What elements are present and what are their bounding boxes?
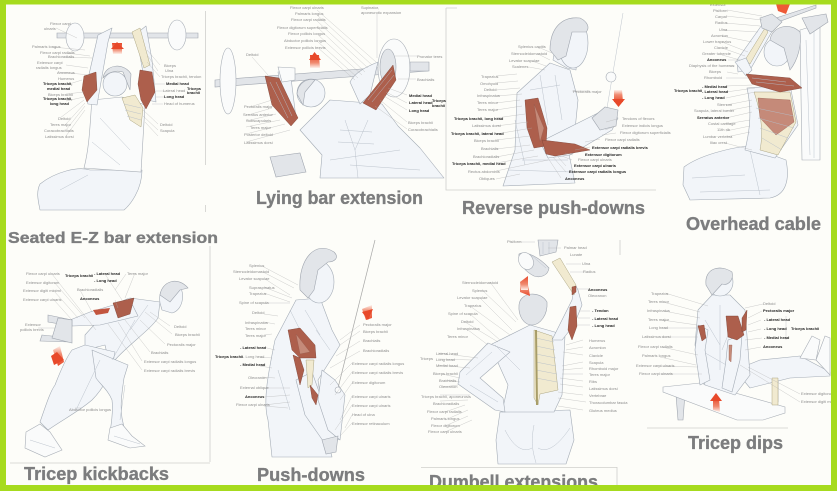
labels: overhead cable: Extensor <box>710 2 726 7</box>
labels: tricep dips: Extensor digitorum <box>801 391 835 396</box>
labels: overhead cable: Sternum <box>717 102 733 107</box>
labels: tricep kickbacks: Pectoralis major <box>167 342 196 347</box>
labels: reverse push-downs: Extensor indicis longus <box>622 123 663 128</box>
labels: dumbbell extensions: Triceps <box>420 356 433 361</box>
labels: reverse push-downs: Obliques <box>479 176 495 181</box>
labels: dumbbell extensions: - Long head <box>592 323 615 328</box>
labels: dumbbell extensions: Latissimus dorsi <box>589 386 618 391</box>
panel: overhead cable <box>674 2 828 234</box>
labels: tricep dips: Pectoralis major <box>763 308 795 313</box>
labels: overhead cable: Radius <box>715 20 727 25</box>
labels: push-downs: Pectoralis major <box>363 322 392 327</box>
title: Overhead cable: Overhead cable <box>686 214 821 234</box>
labels: reverse push-downs: Omohyoid <box>480 81 498 86</box>
labels: lying bar extension: Posterior deltoid <box>244 132 273 137</box>
labels: dumbbell extensions: Brachialis <box>439 378 456 383</box>
labels: reverse push-downs: Triceps brachii, medial head <box>452 161 506 166</box>
labels: dumbbell extensions: Thoracolumbar fascia <box>589 400 628 405</box>
labels: overhead cable: Clavicle <box>714 45 729 50</box>
labels: tricep kickbacks: Extensor digitorum <box>26 280 60 285</box>
labels: overhead cable <box>674 2 762 150</box>
labels: push-downs: - Medial head <box>240 362 266 367</box>
labels: seated E-Z bar extension: Ulna <box>165 68 174 73</box>
labels: tricep dips: Long head <box>649 325 668 330</box>
labels: dumbbell extensions: Lateral head <box>436 351 458 356</box>
labels: tricep dips: Infraspinatus <box>647 308 670 313</box>
labels: lying bar extension: Serratus anterior <box>243 112 273 117</box>
labels: seated E-Z bar extension: Deltoid <box>58 116 70 121</box>
labels: dumbbell extensions: Flexor digitorum <box>431 423 460 428</box>
labels: tricep kickbacks: - Lateral head <box>94 271 121 276</box>
labels: dumbbell extensions: Splenius <box>472 288 487 293</box>
labels: overhead cable: - Lateral head <box>702 89 729 94</box>
title: Tricep kickbacks: Tricep kickbacks <box>24 464 169 484</box>
labels: reverse push-downs: Extensor carpi ulnaris <box>574 163 617 168</box>
labels: seated E-Z bar extension: Coracobrachialis <box>44 128 74 133</box>
labels: dumbbell extensions: Triceps brachii, aponeurosis <box>421 394 471 399</box>
labels: dumbbell extensions: - Tendon <box>592 308 609 313</box>
labels: dumbbell extensions: Olecranon <box>588 293 606 298</box>
labels: reverse push-downs: Rectus abdominis <box>468 169 500 174</box>
labels: tricep dips: - Long head <box>764 326 787 331</box>
labels: reverse push-downs: Teres minor <box>477 100 499 105</box>
labels: dumbbell extensions: Pisiform <box>507 239 522 244</box>
labels: seated E-Z bar extension: Extensor carpi <box>37 60 63 65</box>
panel: tricep kickbacks <box>20 271 200 484</box>
labels: push-downs: Infraspinatus <box>245 320 268 325</box>
labels: lying bar extension: Long head <box>409 108 430 113</box>
labels: tricep dips: - Lateral head <box>764 317 791 322</box>
labels: push-downs: Extensor carpi ulnaris <box>352 394 390 399</box>
labels: seated E-Z bar extension: Latissimus dorsi <box>45 134 74 139</box>
labels: push-downs: Splenius <box>249 263 264 268</box>
labels: tricep dips: - Medial head <box>764 335 790 340</box>
labels: overhead cable: Diaphysis of the humerus <box>689 63 734 68</box>
labels: dumbbell extensions: Ribs <box>589 379 597 384</box>
labels: lying bar extension: brachii <box>432 103 445 108</box>
panel: push-downs <box>215 240 404 485</box>
labels: push-downs: Levator scapulae <box>239 276 270 281</box>
labels: overhead cable: Lower trapezius <box>703 39 731 44</box>
labels: overhead cable: 11th rib <box>717 127 731 132</box>
labels: overhead cable: Lumbar vertebra <box>703 134 733 139</box>
labels: push-downs: Extensor carpi radialis longus <box>352 361 404 366</box>
labels: push-downs: - Long head <box>243 354 264 359</box>
labels: dumbbell extensions: Teres minor <box>447 334 469 339</box>
labels: overhead cable: Scapula, lateral border <box>694 108 735 113</box>
labels: lying bar extension: Triceps <box>432 98 447 103</box>
labels: lying bar extension: Subscapularis <box>246 118 271 123</box>
labels: reverse push-downs: Flexor digitorum superficialis <box>620 130 671 135</box>
labels: tricep dips: Teres major <box>648 317 670 322</box>
labels: tricep dips: Latissimus dorsi <box>642 334 671 339</box>
labels: seated E-Z bar extension: Long head <box>164 94 185 99</box>
labels: dumbbell extensions: Radius <box>583 269 595 274</box>
labels: dumbbell extensions: Vertebrae <box>589 393 607 398</box>
figure: bent-over man with dumbbell <box>25 281 188 457</box>
labels: tricep kickbacks: Anconeus <box>80 296 100 301</box>
labels: push-downs: Teres minor <box>245 326 267 331</box>
labels: push-downs <box>215 263 404 436</box>
labels: overhead cable: Triceps brachii <box>674 88 702 93</box>
labels: tricep dips: Teres minor <box>648 299 670 304</box>
labels: tricep dips: Flexor carpi ulnaris <box>639 371 673 376</box>
figure: man with cable, reverse grip <box>503 13 625 186</box>
labels: lying bar extension: Abductor pollicis longus <box>284 38 326 43</box>
labels: push-downs: Flexor carpi ulnaris <box>236 402 270 407</box>
figure: man doing bench dips <box>663 268 830 420</box>
labels: tricep kickbacks: Triceps brachii <box>65 273 93 278</box>
labels: tricep dips: Anconeus <box>763 344 783 349</box>
labels: overhead cable: Ulna <box>719 27 728 32</box>
labels: dumbbell extensions: Brachioradialis <box>433 401 459 406</box>
labels: seated E-Z bar extension: Medial head <box>166 81 189 86</box>
labels: tricep kickbacks: Extensor digiti minimi <box>23 288 61 293</box>
labels: tricep kickbacks: Abductor pollicis longus <box>69 407 111 412</box>
labels: lying bar extension: Flexor digitorum superficialis <box>277 25 328 30</box>
labels: dumbbell extensions: Infraspinatus <box>457 326 480 331</box>
labels: reverse push-downs <box>451 44 671 181</box>
labels: seated E-Z bar extension: ulnaris <box>44 26 56 31</box>
labels: push-downs: Biceps brachii <box>363 329 388 334</box>
labels: push-downs: Head of ulna <box>352 412 375 417</box>
labels: tricep kickbacks: Deltoid <box>174 324 186 329</box>
labels: tricep kickbacks: Brachialis <box>151 350 168 355</box>
labels: seated E-Z bar extension: brachii <box>187 90 200 95</box>
labels: tricep kickbacks: - Long head <box>94 278 117 283</box>
labels: lying bar extension: Biceps brachii <box>408 120 433 125</box>
labels: seated E-Z bar extension: Head of humerus <box>164 101 195 106</box>
labels: reverse push-downs: Pectoralis major <box>573 89 602 94</box>
labels: lying bar extension: Medial head <box>409 93 432 98</box>
labels: seated E-Z bar extension: radialis longus <box>36 65 62 70</box>
labels: lying bar extension: Palmaris longus <box>295 11 323 16</box>
labels: push-downs: Brachialis <box>363 338 380 343</box>
labels: seated E-Z bar extension: Anconeus <box>57 70 75 75</box>
labels: seated E-Z bar extension: Palmaris longus <box>32 44 60 49</box>
labels: overhead cable: Carpal <box>715 14 727 19</box>
labels: tricep dips <box>636 291 837 404</box>
labels: dumbbell extensions: Palmaris longus <box>431 416 459 421</box>
labels: dumbbell extensions: Medial head <box>436 363 458 368</box>
labels: overhead cable: Costal cartilage <box>708 121 736 126</box>
labels: tricep dips: Triceps brachii <box>791 326 819 331</box>
labels: dumbbell extensions: Anconeus <box>588 287 608 292</box>
title: Tricep dips: Tricep dips <box>688 433 783 453</box>
labels: reverse push-downs: Trapezius <box>481 74 498 79</box>
labels: dumbbell extensions: Trapezius <box>464 303 481 308</box>
labels: reverse push-downs: Extensor digitorum <box>585 152 622 157</box>
labels: tricep kickbacks: Flexor carpi ulnaris <box>26 271 60 276</box>
labels: tricep dips: Trapezius <box>651 291 668 296</box>
labels: lying bar extension: Coracobrachialis <box>408 127 438 132</box>
labels: tricep dips: Deltoid <box>763 301 775 306</box>
labels: tricep kickbacks: Teres major <box>127 271 149 276</box>
labels: overhead cable: Anconeus <box>707 57 727 62</box>
labels: push-downs: Teres major <box>245 333 267 338</box>
labels: dumbbell extensions <box>420 239 628 434</box>
labels: push-downs: External oblique <box>240 385 269 390</box>
labels: dumbbell extensions: Lunate <box>570 252 583 257</box>
labels: reverse push-downs: Deltoid <box>484 87 496 92</box>
labels: reverse push-downs: Sternocleidomastoid <box>511 51 547 56</box>
labels: lying bar extension: Deltoid <box>246 52 258 57</box>
labels: overhead cable: - Medial head <box>702 84 728 89</box>
labels: push-downs: Trapezius <box>249 291 266 296</box>
figure: man on bench with barbell <box>215 39 444 178</box>
labels: seated E-Z bar extension <box>32 21 202 139</box>
labels: seated E-Z bar extension: Biceps brachii <box>48 92 73 97</box>
labels: seated E-Z bar extension: Triceps brachii, <box>43 81 72 86</box>
labels: overhead cable: - Long head <box>702 95 725 100</box>
labels: dumbbell extensions: Long head <box>436 357 455 362</box>
panel: lying bar extension <box>215 5 447 208</box>
labels: push-downs: Sternocleidomastoid <box>233 269 269 274</box>
title: Reverse push-downs: Reverse push-downs <box>462 198 645 218</box>
labels: overhead cable: Rhomboid <box>704 75 722 80</box>
labels: dumbbell extensions: Biceps brachii <box>433 371 458 376</box>
labels: reverse push-downs: Infraspinatus <box>477 93 500 98</box>
labels: tricep kickbacks <box>20 271 200 412</box>
labels: reverse push-downs: Triceps brachii, lateral head <box>451 131 504 136</box>
labels: dumbbell extensions: Levator scapulae <box>457 295 488 300</box>
labels: tricep kickbacks: pollicis brevis <box>20 327 44 332</box>
labels: reverse push-downs: Anconeus <box>565 176 585 181</box>
labels: tricep kickbacks: Brachioradialis <box>77 287 103 292</box>
labels: overhead cable: Biceps <box>709 69 721 74</box>
labels: reverse push-downs: Brachialis <box>481 146 498 151</box>
labels: seated E-Z bar extension: Scapula <box>160 128 175 133</box>
labels: reverse push-downs: Splenius capitis <box>518 44 546 49</box>
labels: tricep kickbacks: Extensor carpi radialis longus <box>144 359 196 364</box>
labels: dumbbell extensions: Deltoid <box>461 319 473 324</box>
labels: lying bar extension: Pronator teres <box>417 54 442 59</box>
figure: seated man with barbell <box>38 20 198 210</box>
labels: seated E-Z bar extension: Lateral head <box>163 88 185 93</box>
labels: reverse push-downs: Tendons of flexors <box>622 116 654 121</box>
labels: reverse push-downs: Triceps brachii, long head <box>454 116 504 121</box>
labels: lying bar extension: Brachialis <box>417 77 434 82</box>
labels: lying bar extension <box>243 5 447 145</box>
labels: lying bar extension: Teres major <box>250 125 272 130</box>
labels: seated E-Z bar extension: medial head <box>47 86 71 91</box>
labels: lying bar extension: Flexor pollicis longus <box>288 31 325 36</box>
labels: push-downs: Supraspinatus <box>249 285 275 290</box>
labels: dumbbell extensions: Palmar head <box>564 245 587 250</box>
labels: seated E-Z bar extension: Humerus <box>58 76 74 81</box>
labels: tricep kickbacks: Biceps brachii <box>175 332 200 337</box>
labels: dumbbell extensions: - Lateral head <box>592 316 619 321</box>
labels: dumbbell extensions: Teres major <box>589 372 611 377</box>
labels: dumbbell extensions: Scapula <box>589 360 604 365</box>
title: Lying bar extension: Lying bar extension <box>256 188 423 208</box>
labels: push-downs: - Lateral head <box>240 345 267 350</box>
labels: overhead cable: Iliac crest <box>710 140 728 145</box>
labels: reverse push-downs: Scalenes <box>512 64 528 69</box>
labels: overhead cable: Acromion <box>711 33 728 38</box>
labels: tricep kickbacks: Extensor carpi radialis brevis <box>144 368 195 373</box>
title: Seated E-Z bar extension: Seated E-Z bar extension <box>8 230 218 247</box>
labels: dumbbell extensions: Flexor carpi ulnaris <box>428 429 462 434</box>
labels: push-downs: Extensor retinaculum <box>352 421 390 426</box>
labels: overhead cable: Pisiform <box>713 8 728 13</box>
figure: standing man with rope push-down <box>266 240 375 457</box>
labels: lying bar extension: Supinator, <box>361 5 379 10</box>
labels: lying bar extension: Extensor pollicis brevis <box>285 45 326 50</box>
labels: dumbbell extensions: Gluteus medius <box>589 408 617 413</box>
labels: push-downs: Spine of scapula <box>239 300 269 305</box>
panel: dumbbell extensions <box>420 239 628 491</box>
labels: push-downs: Extensor carpi radialis brevis <box>352 370 403 375</box>
labels: push-downs: Extensor carpi ulnaris <box>352 403 390 408</box>
labels: overhead cable: Serratus anterior <box>697 115 730 120</box>
labels: tricep kickbacks: Extensor carpi ulnaris <box>23 297 61 302</box>
labels: seated E-Z bar extension: Deltoid <box>160 122 172 127</box>
labels: tricep kickbacks: Extensor <box>25 322 41 327</box>
labels: reverse push-downs: Biceps brachii <box>474 138 499 143</box>
labels: reverse push-downs: Levator scapulae <box>509 58 540 63</box>
labels: seated E-Z bar extension: Biceps <box>164 63 176 68</box>
title: Push-downs: Push-downs <box>257 465 365 485</box>
labels: seated E-Z bar extension: Triceps <box>187 86 202 91</box>
labels: push-downs: Brachioradialis <box>363 348 389 353</box>
labels: dumbbell extensions: Clavicle <box>589 353 604 358</box>
labels: seated E-Z bar extension: Flexor carpi radialis <box>40 50 75 55</box>
labels: dumbbell extensions: Rhomboid major <box>589 366 619 371</box>
labels: reverse push-downs: Teres major <box>477 107 499 112</box>
labels: reverse push-downs: Flexor carpi ulnaris <box>578 157 612 162</box>
labels: push-downs: Triceps brachii <box>215 354 243 359</box>
labels: dumbbell extensions: Sternocleidomastoid <box>462 280 498 285</box>
labels: push-downs: Olecranon <box>248 375 266 380</box>
labels: seated E-Z bar extension: Teres major <box>50 122 72 127</box>
labels: dumbbell extensions: Olecranon <box>439 384 457 389</box>
panel: seated E-Z bar extension <box>8 20 218 247</box>
labels: reverse push-downs: Latissimus dorsi <box>472 123 501 128</box>
labels: seated E-Z bar extension: Flexor carpi <box>50 21 71 26</box>
labels: dumbbell extensions: Spine of scapula <box>448 311 478 316</box>
labels: lying bar extension: Flexor carpi radialis <box>291 17 326 22</box>
labels: push-downs: Deltoid <box>252 310 264 315</box>
panel: tricep dips <box>636 268 837 453</box>
panel: reverse push-downs <box>451 13 671 218</box>
labels: tricep dips: Palmaris longus <box>642 353 670 358</box>
figure: back view with overhead dumbbell <box>458 240 582 464</box>
labels: dumbbell extensions: Flexor carpi radialis <box>427 409 462 414</box>
labels: seated E-Z bar extension: Brachioradialis <box>48 54 74 59</box>
labels: lying bar extension: Latissimus dorsi <box>244 140 273 145</box>
labels: seated E-Z bar extension: Triceps brachii, tendon <box>161 74 201 79</box>
labels: reverse push-downs: Extensor carpi radialis brevis <box>592 145 649 150</box>
figure: kneeling man with overhead cable <box>683 4 828 200</box>
labels: lying bar extension: Flexor carpi ulnaris <box>290 5 324 10</box>
labels: lying bar extension: Lateral head <box>409 100 433 105</box>
labels: push-downs: Anconeus <box>245 394 265 399</box>
labels: push-downs: Extensor digitorum <box>352 380 386 385</box>
labels: dumbbell extensions: Ulna <box>582 261 591 266</box>
labels: lying bar extension: Pectoralis major <box>244 104 273 109</box>
labels: reverse push-downs: Brachioradialis <box>473 154 499 159</box>
labels: dumbbell extensions: Acromion <box>589 345 606 350</box>
labels: seated E-Z bar extension: long head <box>50 101 69 106</box>
labels: reverse push-downs: Flexor carpi radialis <box>605 137 640 142</box>
labels: tricep dips: Extensor carpi ulnaris <box>636 363 674 368</box>
labels: dumbbell extensions: Humerus <box>589 338 605 343</box>
labels: overhead cable: Greater tubercle <box>702 51 732 56</box>
labels: lying bar extension: aponeurotic expansion <box>361 10 401 15</box>
labels: reverse push-downs: Extensor carpi radialis longus <box>569 169 627 174</box>
labels: seated E-Z bar extension: Triceps brachii, <box>43 96 72 101</box>
labels: tricep dips: Flexor carpi radialis <box>638 344 673 349</box>
